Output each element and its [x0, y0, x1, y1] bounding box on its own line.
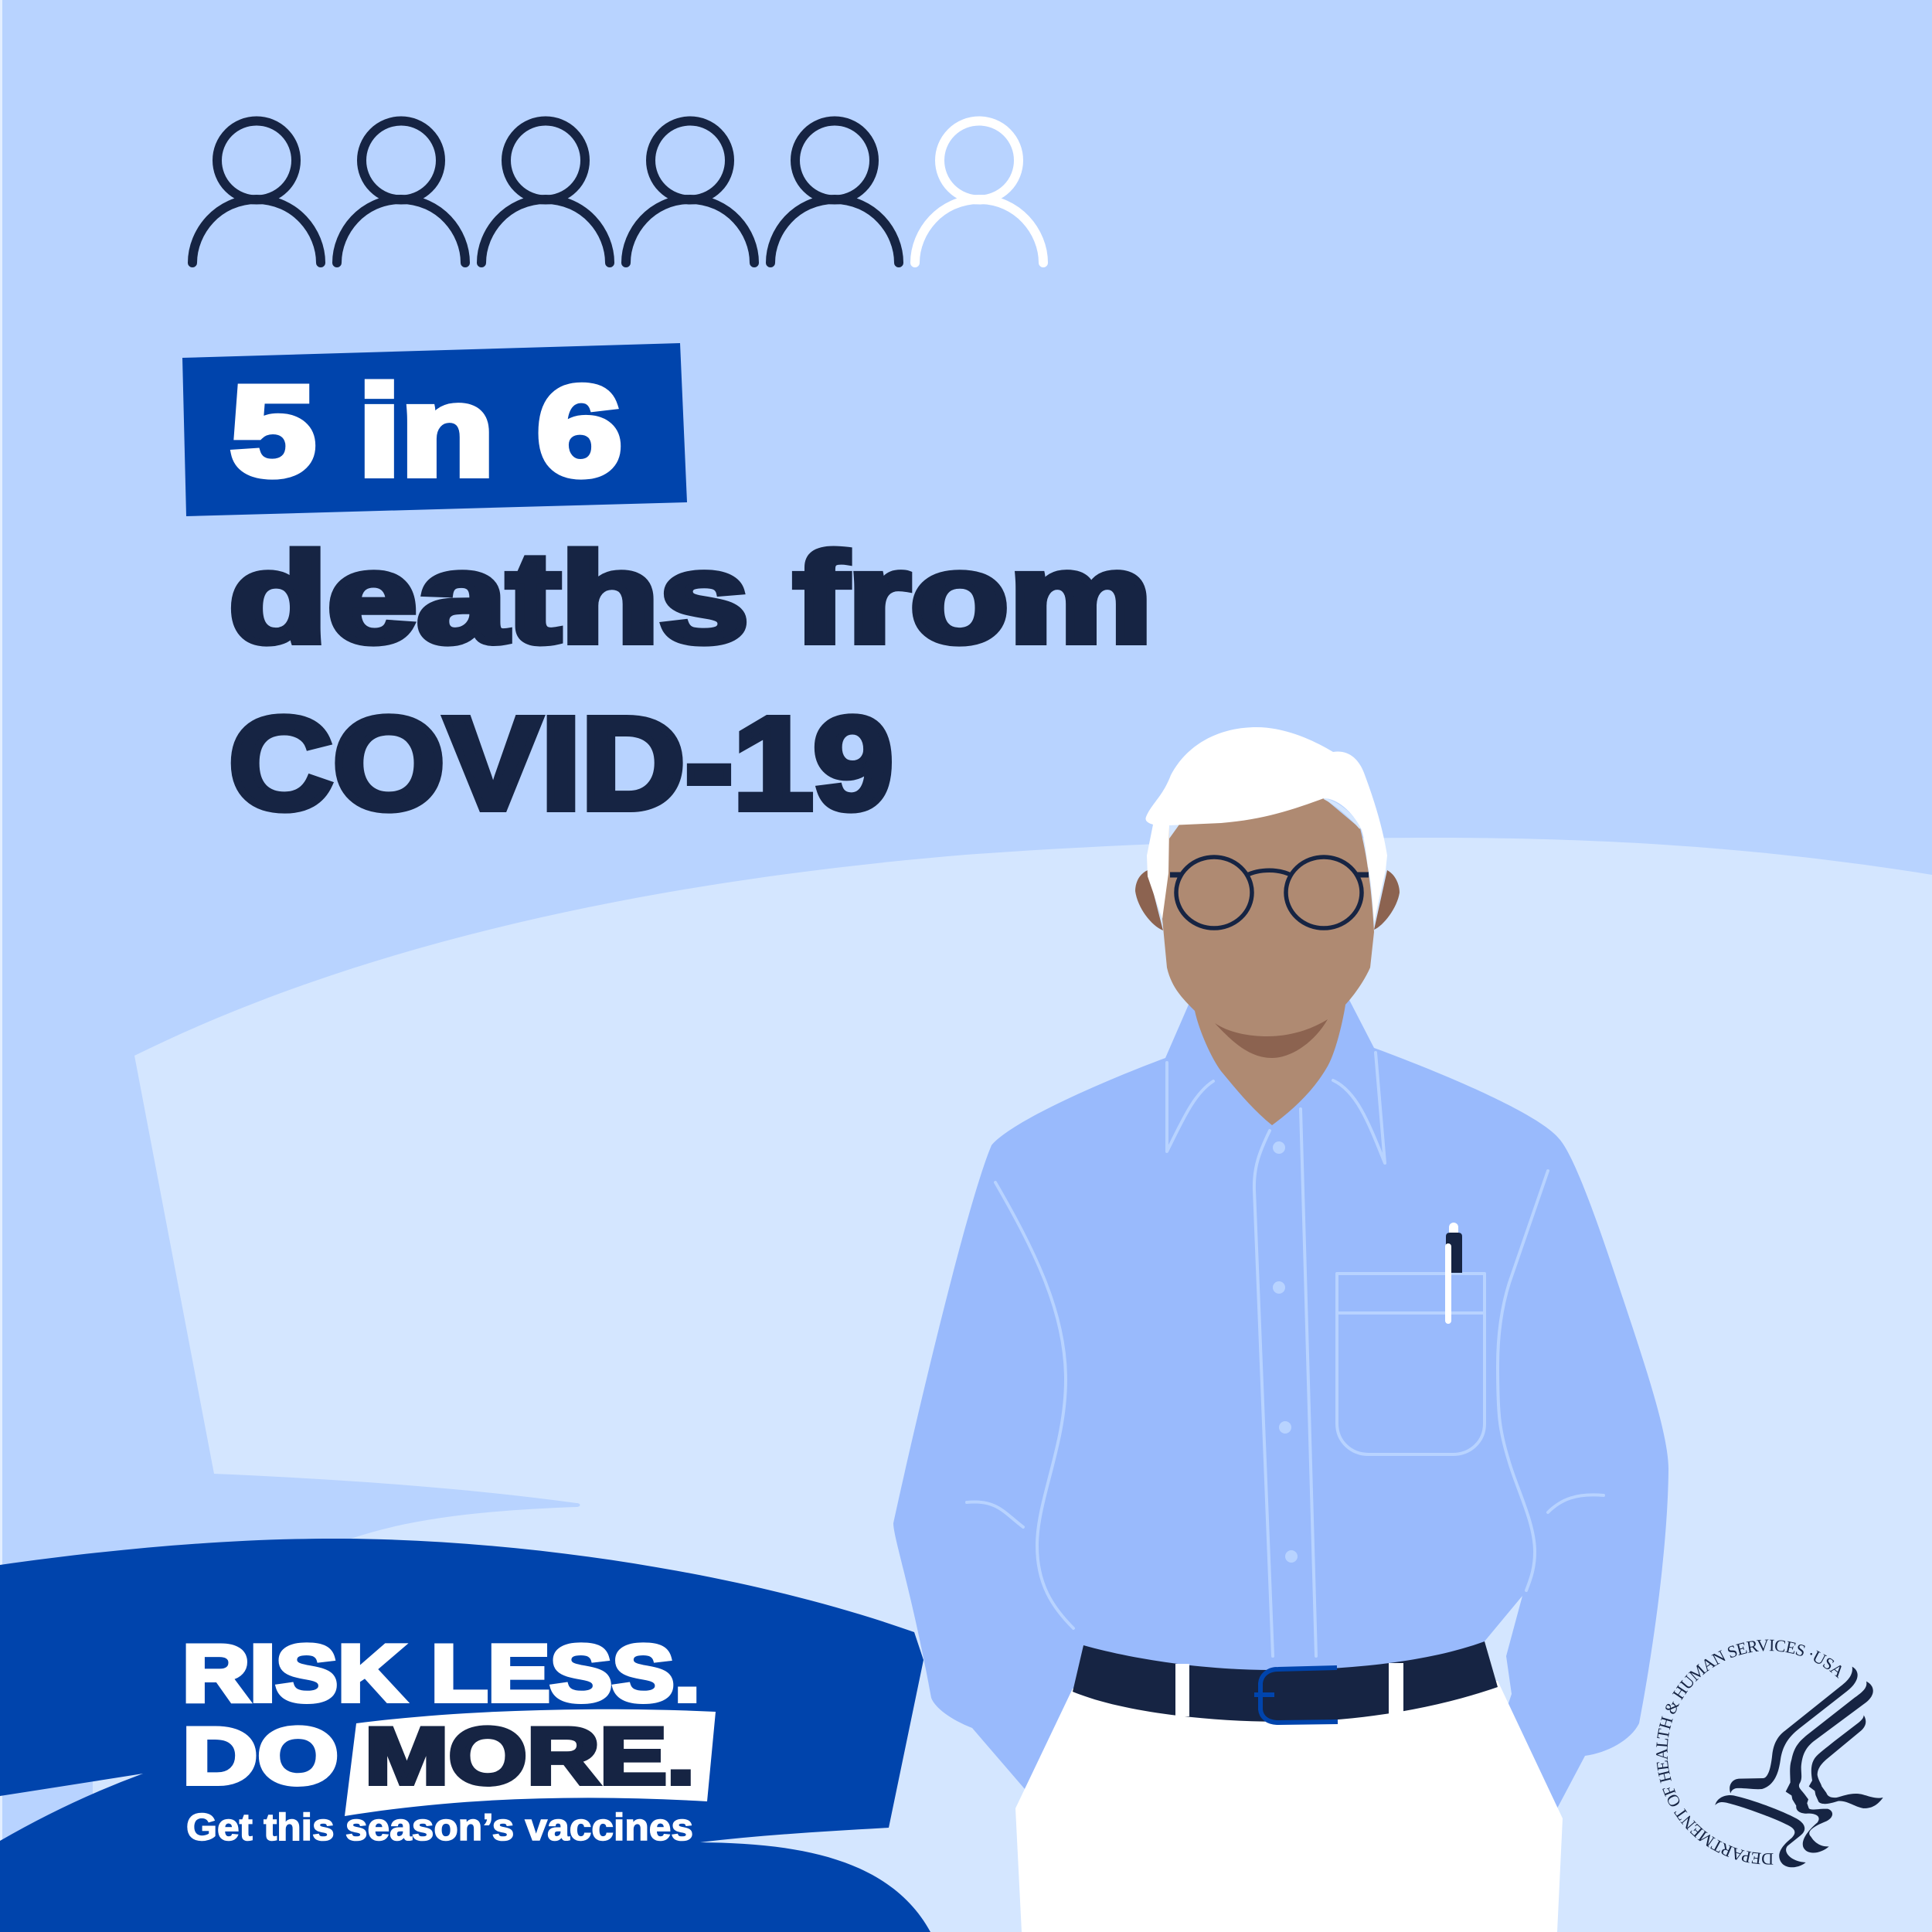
hair: [1145, 727, 1387, 922]
pocket flap: [1337, 1311, 1485, 1315]
left elbow crease: [967, 1502, 1023, 1527]
face: [1162, 796, 1374, 1125]
left arm line: [995, 1182, 1073, 1628]
shirt: [893, 1000, 1668, 1808]
campaign blue panel: [0, 1539, 930, 1932]
person icon 5: [770, 121, 899, 263]
right elbow crease: [1548, 1495, 1604, 1512]
mouth shadow: [1215, 1019, 1328, 1058]
slogan box: MORE: [345, 1709, 716, 1816]
slogan: DO: DO: [182, 1712, 338, 1801]
headline: COVID-19: COVID-19: [229, 691, 893, 838]
eagle emblem: [1715, 1667, 1883, 1867]
tagline: Get this season’s vaccines: [186, 1807, 693, 1849]
belt: [1073, 1641, 1498, 1723]
pen cap: [1449, 1223, 1458, 1238]
person icon 3: [481, 121, 610, 263]
slogan: MORE.: MORE.: [365, 1712, 695, 1801]
pocket: [1337, 1274, 1485, 1454]
trousers: [1015, 1681, 1563, 1932]
right arm line: [1498, 1171, 1548, 1590]
pen in pocket: [1445, 1223, 1462, 1324]
notch light sliver: [93, 1770, 155, 1804]
left lens: [1176, 857, 1252, 928]
glasses: [1170, 857, 1369, 928]
seal ring path: [1668, 1651, 1856, 1853]
person icon 6 (white): [915, 121, 1043, 263]
headline: 5 in 6: 5 in 6: [230, 360, 622, 502]
belt strap: [1073, 1641, 1498, 1722]
left temple: [1170, 872, 1182, 878]
shirt seam lines: [967, 1053, 1604, 1656]
belt loop right: [1389, 1663, 1403, 1715]
pen clip: [1445, 1243, 1451, 1324]
pen body: [1446, 1233, 1462, 1273]
left collar: [1167, 1063, 1213, 1151]
right collar: [1333, 1053, 1385, 1163]
headline: deaths from: deaths from: [229, 527, 1152, 669]
headline banner: [182, 343, 687, 516]
right ear: [1374, 870, 1400, 930]
right temple: [1357, 872, 1369, 878]
person icon 1: [192, 121, 321, 263]
placket left: [1254, 1131, 1273, 1656]
forehead highlights: [1170, 798, 1360, 836]
person icon 2: [337, 121, 465, 263]
seal text: DEPARTMENT OF HEALTH & HUMAN SERVICES ·USA: [1656, 1640, 1842, 1865]
bridge: [1246, 870, 1292, 876]
right lens: [1286, 857, 1362, 928]
slogan: RISK LESS.: RISK LESS.: [182, 1629, 700, 1719]
gap between arm and torso: [1485, 1596, 1522, 1694]
person icon 4: [626, 121, 754, 263]
left ear: [1135, 870, 1163, 930]
blue swoosh: [0, 1539, 930, 1932]
person illustration: [893, 727, 1668, 1932]
placket right: [1301, 1109, 1316, 1656]
people icon row: [192, 121, 1043, 263]
belt loop left: [1175, 1664, 1189, 1716]
belt buckle: [1254, 1668, 1338, 1723]
shirt buttons: [1273, 1141, 1298, 1563]
HHS seal: [1656, 1640, 1883, 1867]
background light shape: [134, 838, 1932, 1932]
